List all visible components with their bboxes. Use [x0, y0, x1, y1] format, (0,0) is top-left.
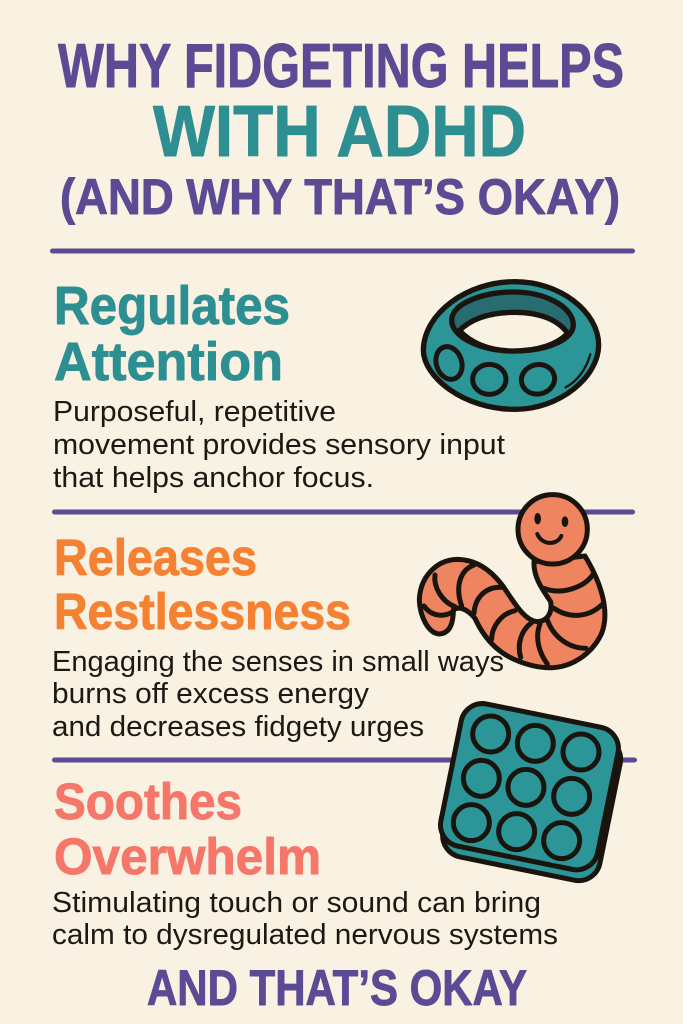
heading: releases restlessness: Restlessness	[54, 583, 351, 640]
title: WITH ADHD	[153, 92, 526, 172]
heading: soothes overwhelm	[54, 773, 321, 885]
heading: soothes overwhelm: Overwhelm	[54, 828, 321, 885]
heading: regulates attention: Attention	[54, 332, 283, 392]
title	[58, 32, 624, 225]
panel: soothes overwhelm	[52, 700, 624, 951]
heading: regulates attention: Regulates	[54, 276, 290, 336]
heading: releases restlessness	[54, 529, 351, 640]
heading: soothes overwhelm: Soothes	[54, 773, 242, 830]
icon: smiling worm	[419, 495, 605, 668]
text: releases restlessness body: Engaging the senses in small ways	[52, 646, 504, 678]
closing line: AND THAT’S OKAY	[147, 960, 527, 1016]
text: releases restlessness body: burns off excess energy	[52, 678, 370, 710]
text: soothes overwhelm body	[52, 887, 558, 951]
panel: releases restlessness	[52, 495, 605, 743]
text: releases restlessness body: and decreases fidgety urges	[52, 711, 424, 743]
icon: teal pop-it toy	[437, 700, 624, 885]
text: soothes overwhelm body: Stimulating touch or sound can bring	[52, 887, 541, 919]
text: regulates attention body: Purposeful, repetitive	[53, 396, 336, 428]
text: regulates attention body: that helps anchor focus.	[53, 462, 374, 494]
heading: regulates attention	[54, 276, 290, 392]
heading: releases restlessness: Releases	[54, 529, 257, 586]
icon: teal fidget ring	[423, 282, 599, 409]
text: soothes overwhelm body: calm to dysregulated nervous systems	[52, 919, 558, 951]
text: regulates attention body: movement provides sensory input	[53, 429, 505, 461]
text: regulates attention body	[53, 396, 505, 494]
text: releases restlessness body	[52, 646, 504, 743]
title: (AND WHY THAT’S OKAY)	[60, 169, 620, 225]
panel: regulates attention	[53, 276, 599, 494]
